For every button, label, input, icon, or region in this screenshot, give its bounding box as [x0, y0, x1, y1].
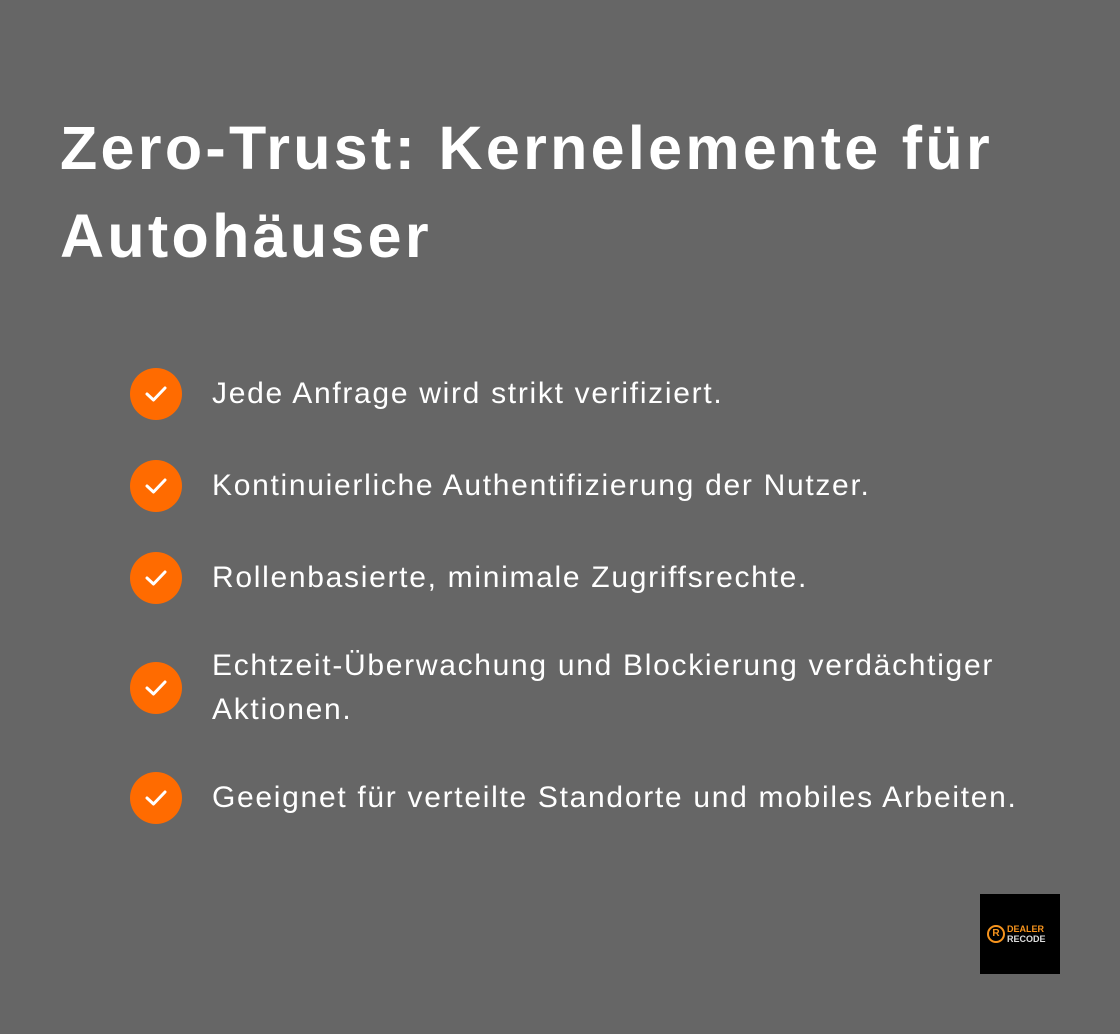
text: Geeignet für verteilte Standorte und mobiles Arbeiten. [212, 781, 1018, 814]
text: Aktionen. [212, 693, 352, 726]
logo [980, 894, 1060, 974]
item 4 [130, 649, 994, 726]
text [212, 649, 994, 726]
title [60, 114, 993, 270]
item 5 [130, 772, 1018, 824]
logo text: DEALER [1007, 924, 1044, 934]
text: Jede Anfrage wird strikt verifiziert. [212, 377, 723, 410]
text: Echtzeit-Überwachung und Blockierung verdächtiger [212, 649, 994, 682]
icon: check [130, 772, 182, 824]
text: Rollenbasierte, minimale Zugriffsrechte. [212, 561, 808, 594]
item 3 [130, 552, 808, 604]
icon: check [130, 368, 182, 420]
logo text: RECODE [1007, 934, 1046, 944]
icon: check [130, 460, 182, 512]
item 1 [130, 368, 723, 420]
title: Zero-Trust: Kernelemente für [60, 114, 993, 182]
title: Autohäuser [60, 202, 432, 270]
text: Kontinuierliche Authentifizierung der Nutzer. [212, 469, 871, 502]
icon: check [130, 662, 182, 714]
logo icon: R [992, 928, 1000, 939]
logo icon [987, 925, 1005, 943]
item 2 [130, 460, 871, 512]
logo text [1007, 924, 1046, 944]
icon: check [130, 552, 182, 604]
